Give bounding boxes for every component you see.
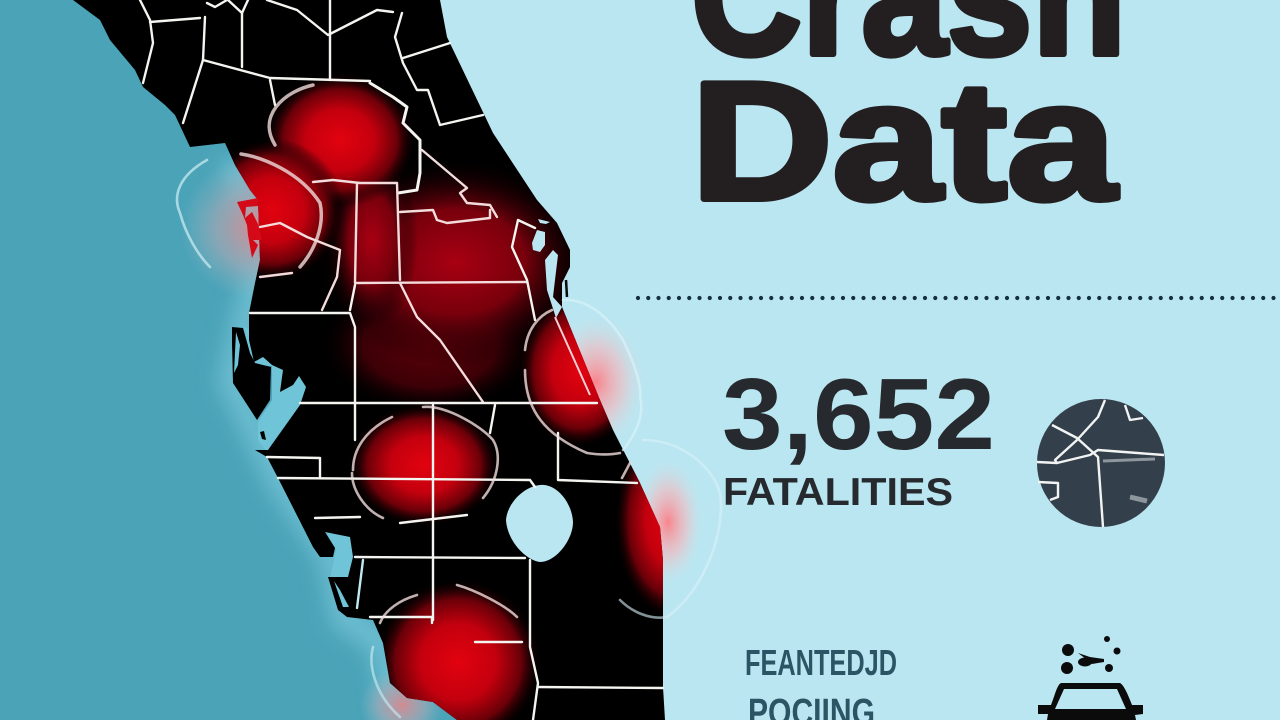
stat: 3,652 fatalities: FATALITIES — [723, 471, 953, 514]
divider: dotted line — [638, 296, 1280, 300]
water inlets — [244, 326, 356, 579]
halos over water — [180, 156, 702, 720]
land silhouette — [73, 0, 665, 720]
title — [691, 0, 1126, 235]
east coast lagoon — [532, 219, 562, 318]
panel: ocean — [0, 0, 500, 720]
peninsula — [232, 327, 271, 440]
title: Data — [691, 47, 1118, 235]
text: garbled label — [745, 642, 897, 720]
icon: crashed car with smoke — [1038, 636, 1143, 720]
icon: road map circle — [1037, 399, 1165, 527]
text: garbled label: FEANTEDJD — [745, 642, 897, 683]
crash hotspots — [230, 77, 663, 720]
map: Florida counties — [73, 0, 730, 720]
stat: 3,652 fatalities — [722, 359, 995, 514]
lake okeechobee — [506, 485, 573, 562]
tampa bay red fragments — [237, 198, 262, 258]
hotspot rings — [177, 85, 721, 717]
county lines — [140, 0, 663, 720]
stat: 3,652 fatalities: 3,652 — [722, 359, 995, 471]
